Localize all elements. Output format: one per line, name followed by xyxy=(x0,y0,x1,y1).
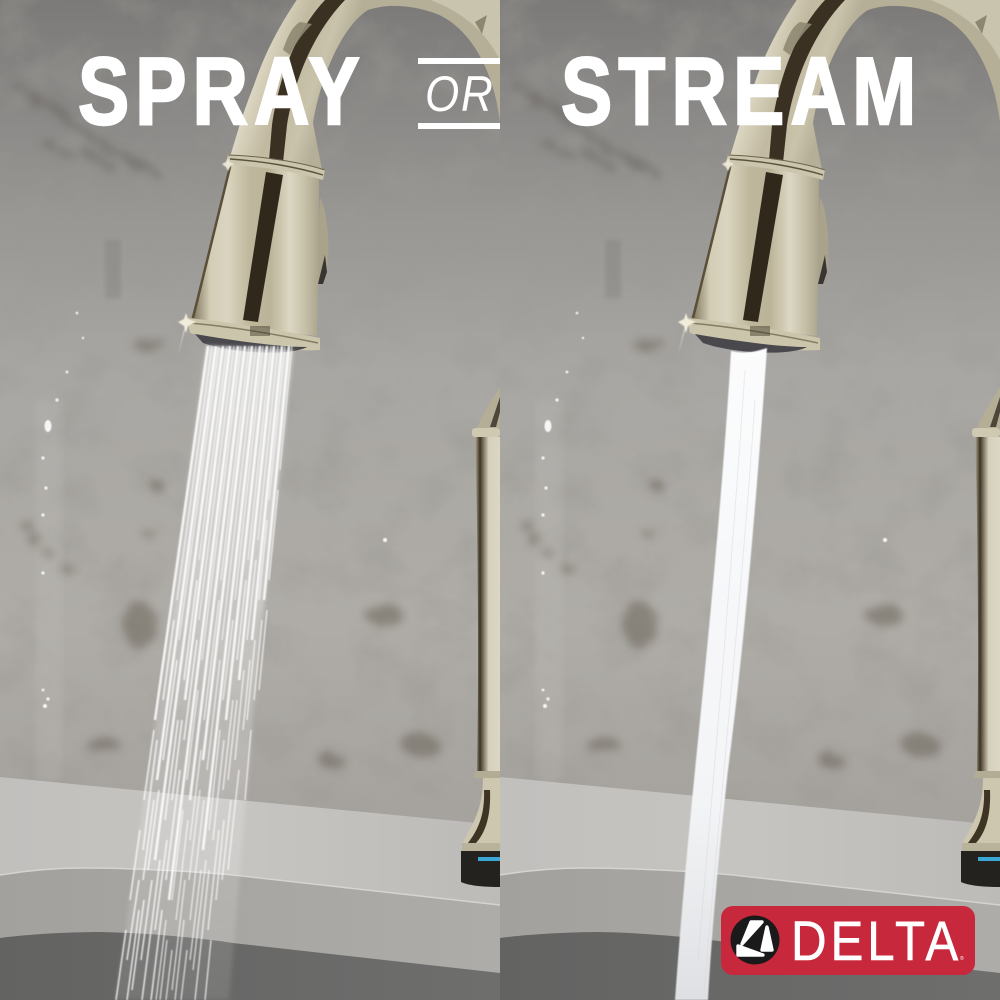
connector: or: OR xyxy=(425,65,493,122)
connector: or xyxy=(418,58,500,129)
spray water xyxy=(115,346,293,1000)
logo: delta: ® xyxy=(960,955,964,962)
logo: delta xyxy=(721,906,975,975)
stream water xyxy=(675,348,767,1000)
logo: delta: DELTA xyxy=(791,910,959,973)
panel: spray xyxy=(0,0,500,1000)
title: spray: SPRAY xyxy=(78,38,360,145)
icon: delta mark xyxy=(730,916,780,964)
title: stream: STREAM xyxy=(561,38,916,145)
panel: stream xyxy=(500,0,1000,1000)
